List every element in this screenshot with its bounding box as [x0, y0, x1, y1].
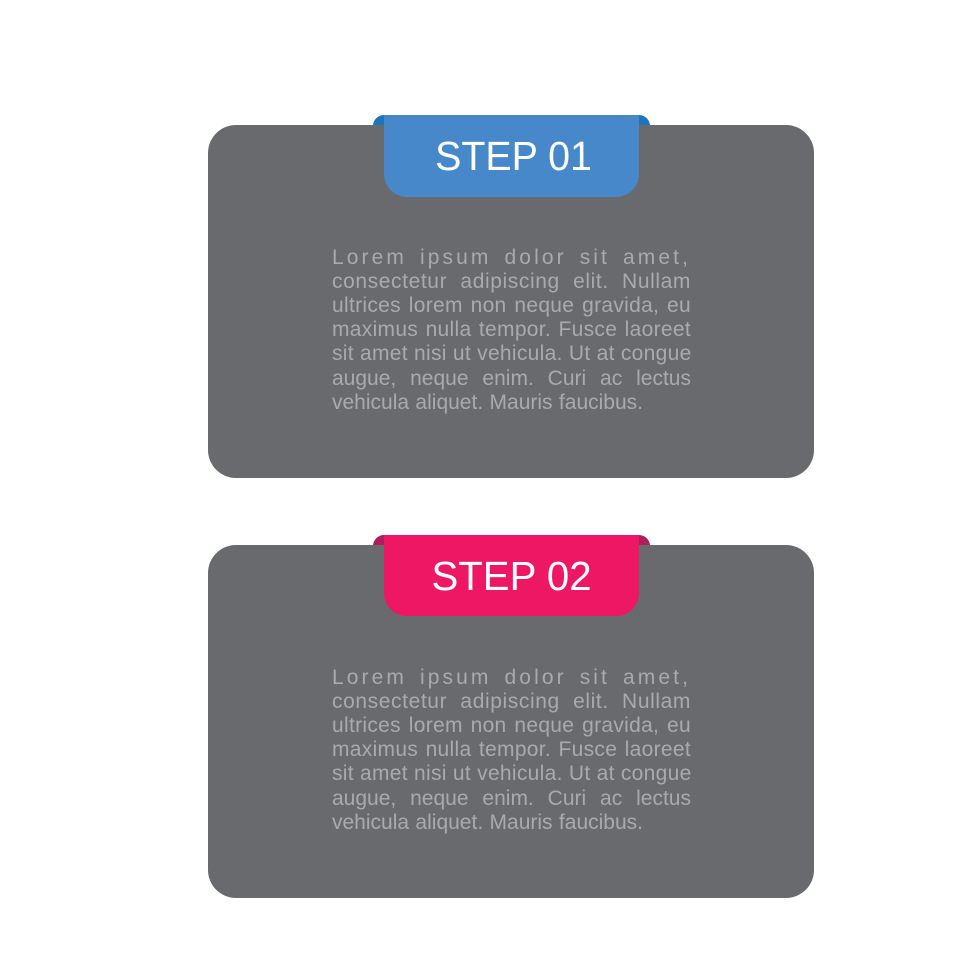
panel background: step 01 [208, 125, 814, 478]
text block: step 02: augue, neque enim. Curi ac lectus [332, 786, 691, 810]
panel background: step 02 [208, 545, 814, 898]
text block: step 01: sit amet nisi ut vehicula. Ut at congue [332, 342, 692, 365]
text block: step 01: Lorem ipsum dolor sit amet, [332, 246, 691, 268]
text block: step 02: Lorem ipsum dolor sit amet, [332, 666, 691, 688]
text block: step 01: consectetur adipiscing elit. Nullam [332, 270, 691, 293]
text block: step 02: consectetur adipiscing elit. Nullam [332, 690, 691, 713]
ribbon fold: step 02 [373, 535, 650, 555]
ribbon tab: step 02 [384, 535, 639, 616]
text block: step 02 [332, 666, 692, 834]
panel: step 01 [208, 115, 814, 478]
text block: step 01: augue, neque enim. Curi ac lectus [332, 366, 691, 390]
ribbon tab: step 01 [384, 115, 639, 197]
text block: step 02: sit amet nisi ut vehicula. Ut at congue [332, 762, 692, 785]
heading: step 02: STEP 02 [431, 553, 592, 599]
text block: step 01: ultrices lorem non neque gravida, eu [332, 294, 691, 317]
panel: step 02 [208, 535, 814, 898]
text block: step 01: vehicula aliquet. Mauris faucibus. [332, 391, 643, 414]
text block: step 02: ultrices lorem non neque gravida, eu [332, 714, 691, 737]
text block: step 02: maximus nulla tempor. Fusce laoreet [332, 738, 691, 761]
text block: step 01: maximus nulla tempor. Fusce laoreet [332, 318, 691, 341]
text block: step 02: vehicula aliquet. Mauris faucibus. [332, 811, 643, 834]
ribbon fold: step 01 [373, 115, 650, 135]
heading: step 01: STEP 01 [435, 133, 591, 179]
text block: step 01 [332, 246, 692, 414]
